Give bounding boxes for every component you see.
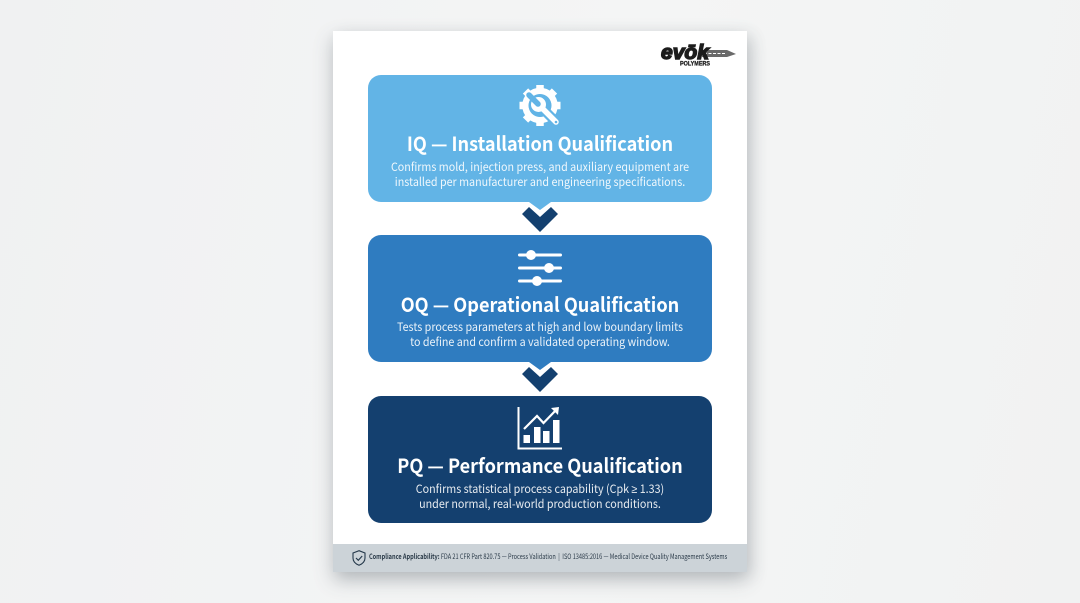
logo: evok polymers: evōk: [661, 42, 710, 64]
icon: gear and wrench: [520, 85, 560, 126]
compliance text: Compliance Applicability: FDA 21 CFR Part 820.75 — Process Validation | ISO 13485:2016 — Medical Device Quality Management Systems: [369, 552, 727, 562]
icon: sliders: [518, 250, 562, 286]
arrow 2: [522, 362, 558, 392]
description: under normal, real-world production conditions.: [419, 496, 661, 512]
heading: IQ — Installation Qualification: [407, 128, 673, 157]
icon: bar chart with arrow: [518, 407, 562, 450]
description: [397, 319, 683, 350]
logo: evok polymers: [660, 42, 736, 68]
panel: PQ: [368, 396, 712, 523]
paper sheet: [333, 31, 747, 572]
description: Confirms mold, injection press, and auxiliary equipment are: [391, 159, 689, 175]
description: [391, 159, 689, 190]
panel: OQ: [368, 235, 712, 362]
heading: PQ — Performance Qualification: [397, 450, 683, 479]
description: Confirms statistical process capability (Cpk ≥ 1.33): [416, 480, 664, 496]
panel: IQ: [368, 75, 712, 202]
icon: shield: [352, 550, 366, 566]
description: to define and confirm a validated operating window.: [410, 334, 670, 350]
description: Tests process parameters at high and low boundary limits: [397, 319, 683, 335]
description: installed per manufacturer and engineering specifications.: [395, 174, 685, 190]
footer: compliance bar: [333, 544, 747, 572]
heading: OQ — Operational Qualification: [401, 289, 679, 318]
description: [416, 480, 664, 512]
logo: evok polymers: POLYMERS: [680, 60, 711, 68]
arrow 1: [522, 202, 558, 232]
